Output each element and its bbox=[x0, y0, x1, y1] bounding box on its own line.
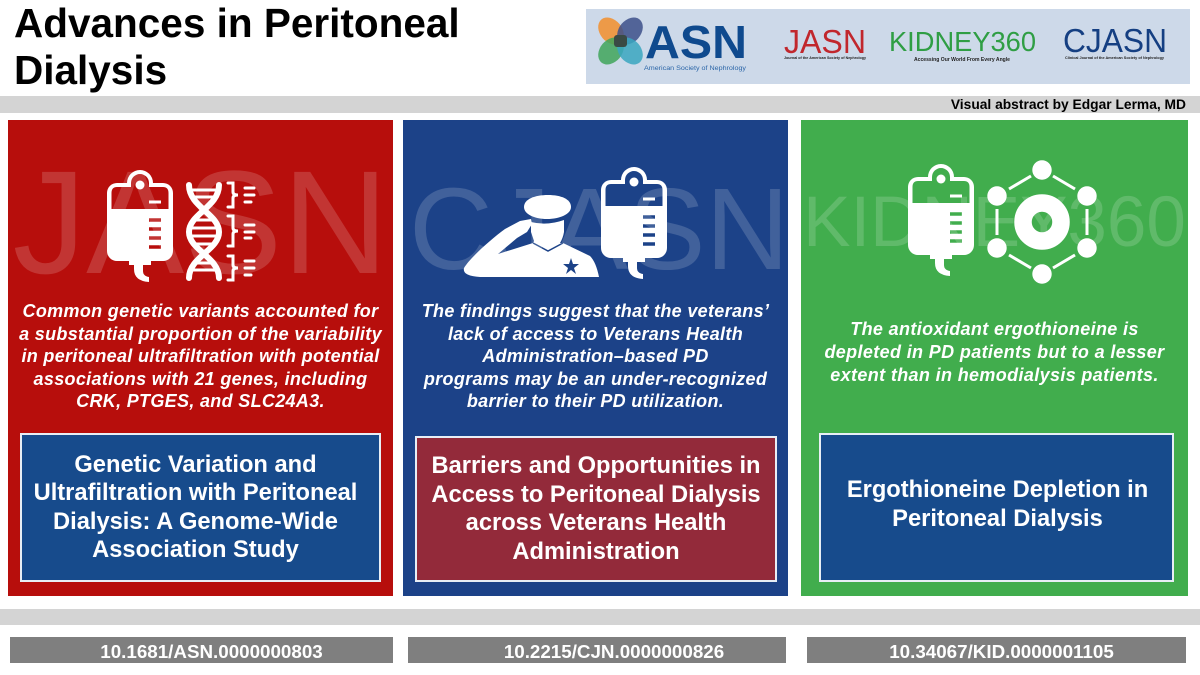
article title box: Kidney360 bbox=[819, 433, 1174, 582]
description: JASN: Common genetic variants accounted for bbox=[23, 301, 378, 321]
description: JASN: a substantial proportion of the variability bbox=[19, 324, 382, 344]
article title box: JASN: Genetic Variation and bbox=[74, 452, 317, 478]
watermark: KIDNEY360: KIDNEY360 bbox=[803, 183, 1186, 262]
article title box: JASN: Dialysis: A Genome-Wide bbox=[53, 508, 338, 534]
watermark: JASN: JASN bbox=[13, 141, 388, 305]
logo: ASN: American Society of Nephrology bbox=[644, 65, 747, 72]
title: Advances in Peritoneal bbox=[14, 0, 460, 46]
article title box: JASN: Association Study bbox=[92, 537, 299, 563]
title bbox=[14, 0, 460, 93]
article title box: JASN bbox=[20, 433, 381, 582]
description: CJASN: The findings suggest that the veterans’ bbox=[422, 301, 769, 321]
article title box: CJASN: across Veterans Health bbox=[466, 510, 726, 536]
watermark: CJASN: CJASN bbox=[409, 164, 788, 294]
article title box: JASN: Ultrafiltration with Peritoneal bbox=[34, 480, 357, 506]
DOI: CJASN: 10.2215/CJN.0000000826 bbox=[504, 641, 724, 662]
description: Kidney360 bbox=[824, 319, 1165, 385]
description: Kidney360: extent than in hemodialysis patients. bbox=[830, 365, 1159, 385]
description: JASN bbox=[19, 301, 382, 411]
DOI: JASN bbox=[10, 637, 393, 663]
description: CJASN bbox=[422, 301, 770, 411]
DOI: Kidney360 bbox=[807, 637, 1186, 663]
panel: JASN bbox=[8, 120, 393, 596]
DOI: JASN: 10.1681/ASN.0000000803 bbox=[100, 641, 323, 662]
description: JASN: associations with 21 genes, including bbox=[34, 368, 367, 388]
icon: IV bag and molecule bbox=[908, 160, 1097, 284]
logo: KIDNEY360: KIDNEY360 bbox=[889, 26, 1036, 57]
description: Kidney360: depleted in PD patients but to a lesser bbox=[824, 342, 1165, 362]
title: Dialysis bbox=[14, 47, 167, 93]
description: CJASN: barrier to their PD utilization. bbox=[467, 391, 724, 411]
DOI: CJASN bbox=[408, 637, 786, 663]
panel: Kidney360 bbox=[801, 120, 1188, 596]
logo: CJASN: CJASN bbox=[1063, 22, 1167, 59]
icon: IV bag and DNA bbox=[107, 170, 256, 282]
icon: saluting soldier and IV bag bbox=[464, 167, 667, 279]
description: Kidney360: The antioxidant ergothioneine is bbox=[850, 319, 1139, 339]
logo: ASN: ASN bbox=[645, 16, 747, 68]
top grey bar with credit: Visual abstract by Edgar Lerma, MD bbox=[951, 97, 1186, 112]
top grey bar with credit bbox=[0, 96, 1200, 113]
DOI: Kidney360: 10.34067/KID.0000001105 bbox=[889, 641, 1114, 662]
description: CJASN: Administration–based PD bbox=[482, 346, 709, 366]
logo: KIDNEY360: Accessing Our World From Every Angle bbox=[914, 57, 1010, 63]
article title box: CJASN: Barriers and Opportunities in bbox=[431, 453, 761, 479]
article title box: CJASN: Access to Peritoneal Dialysis bbox=[431, 482, 761, 508]
article title box: Kidney360: Ergothioneine Depletion in bbox=[847, 477, 1148, 503]
logo banner bbox=[586, 9, 1190, 84]
logo: ASN bbox=[593, 12, 747, 72]
logo: JASN: Journal of the American Society of Nephrology bbox=[784, 56, 866, 60]
article title box: CJASN bbox=[415, 436, 777, 582]
bottom grey bar bbox=[0, 609, 1200, 625]
description: CJASN: lack of access to Veterans Health bbox=[448, 324, 743, 344]
panel: CJASN bbox=[403, 120, 788, 596]
description: JASN: CRK, PTGES, and SLC24A3. bbox=[76, 391, 325, 411]
description: CJASN: programs may be an under-recognized bbox=[424, 368, 767, 388]
description: JASN: in peritoneal ultrafiltration with potential bbox=[21, 346, 380, 366]
article title box: Kidney360: Peritoneal Dialysis bbox=[892, 506, 1103, 532]
article title box: CJASN: Administration bbox=[512, 538, 680, 564]
logo: CJASN: Clinical Journal of the American Society of Nephrology bbox=[1065, 56, 1164, 60]
logo: JASN: JASN bbox=[784, 23, 866, 60]
